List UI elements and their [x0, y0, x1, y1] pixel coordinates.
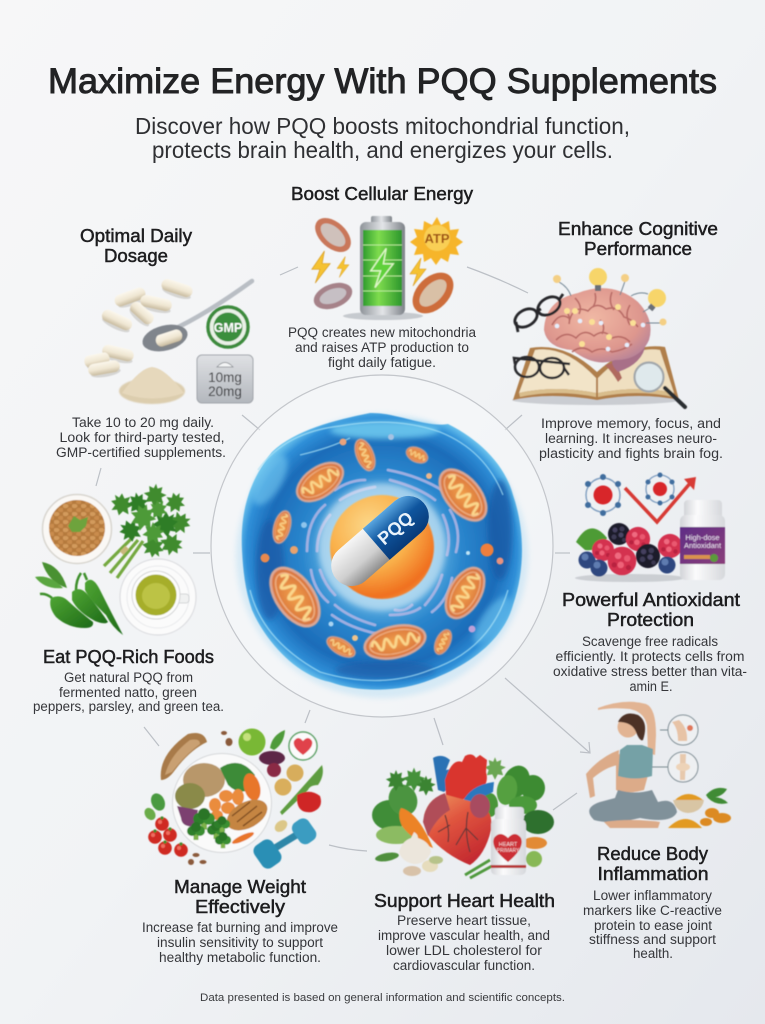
body text: Take 10 to 20 mg daily.: [72, 415, 214, 430]
body text: [56, 415, 226, 460]
body text: PQQ creates new mitochondria: [288, 325, 476, 340]
central illustration: cell with PQQ capsule: [236, 413, 528, 698]
heading: Enhance Cognitive: [558, 218, 718, 239]
body text: GMP-certified supplements.: [56, 445, 226, 460]
body text: stiffness and support: [589, 932, 716, 947]
body text: plasticity and fights brain fog.: [539, 446, 723, 461]
panel: antioxidant protection: [553, 472, 747, 694]
central ring: [211, 375, 553, 717]
icon: capsules, spoon, GMP seal, scale: 20mg: [208, 384, 242, 399]
subtitle: [135, 113, 630, 163]
heading: Optimal Daily: [80, 225, 193, 246]
body text: cardiovascular function.: [393, 958, 535, 973]
heading: Protection: [607, 609, 694, 630]
body text: improve vascular health, and: [378, 928, 550, 943]
panel: manage weight: [142, 728, 338, 965]
panel: enhance cognitive performance: [512, 218, 723, 461]
heading: Eat PQQ-Rich Foods: [43, 646, 214, 667]
body text: fight daily fatigue.: [328, 355, 436, 370]
icon: atoms, berries, bottle, arrow: High-dose: [685, 533, 720, 542]
icon: capsules, spoon, GMP seal, scale: 10mg: [208, 370, 242, 385]
panel: PQQ-rich foods: [33, 483, 224, 714]
body text: oxidative stress better than vita-: [553, 664, 747, 679]
icon: heart, vegetables, supplement bottle: PRIMARY: [497, 848, 520, 854]
heading: Performance: [584, 238, 692, 259]
panel: reduce inflammation: [583, 702, 731, 961]
body text: Scavenge free radicals: [582, 634, 718, 649]
body text: Increase fat burning and improve: [142, 920, 338, 935]
membrane highlights: [250, 422, 508, 681]
body text: Lower inflammatory: [593, 888, 712, 903]
subtitle: protects brain health, and energizes your cells.: [152, 137, 613, 163]
mitochondria: [261, 437, 495, 664]
icon: battery and mitochondria: ATP: [424, 231, 450, 246]
icon: brain, book, glasses: [512, 268, 685, 407]
heading: Inflammation: [598, 863, 708, 884]
heading: [597, 843, 709, 884]
icon: atoms, berries, bottle, arrow: [575, 472, 725, 582]
cell membrane: [242, 413, 522, 690]
body text: [553, 634, 747, 694]
body text: lower LDL cholesterol for: [386, 943, 543, 958]
heading: Effectively: [195, 896, 286, 917]
title: Maximize Energy With PQQ Supplements: [48, 62, 717, 101]
icon: heart, vegetables, supplement bottle: [372, 754, 554, 878]
body text: learning. It increases neuro-: [545, 431, 717, 446]
body text: peppers, parsley, and green tea.: [33, 699, 224, 714]
heading: [558, 218, 718, 259]
panel: support heart health: [372, 754, 555, 973]
body text: healthy metabolic function.: [159, 950, 321, 965]
body text: Get natural PQQ from: [64, 670, 193, 685]
nucleus: [318, 483, 446, 611]
footer note: Data presented is based on general information and scientific concepts.: [200, 992, 565, 1004]
body text: [142, 920, 338, 965]
body text: protein to ease joint: [594, 918, 712, 933]
body text: [539, 416, 723, 461]
cytoplasm shading: [246, 421, 516, 679]
heading: Dosage: [104, 245, 168, 266]
organelle dots: [260, 434, 504, 641]
body text: fermented natto, green: [59, 685, 197, 700]
body text: amin E.: [630, 679, 672, 694]
body text: and raises ATP production to: [295, 340, 469, 355]
heading: [174, 876, 306, 917]
icon: woman stretching, joints, turmeric: [586, 702, 731, 828]
icon: capsules, spoon, GMP seal, scale: [83, 277, 253, 404]
icon: plate of food, dumbbell, vegetables: [142, 728, 323, 871]
icon: battery and mitochondria: [309, 211, 463, 321]
body text: efficiently. It protects cells from: [556, 649, 744, 664]
body text: [378, 913, 550, 973]
panel: optimal daily dosage: [56, 225, 253, 460]
body text: health.: [633, 946, 673, 961]
connector lines: [96, 267, 590, 851]
heading: Powerful Antioxidant: [562, 589, 740, 610]
heading: [562, 589, 740, 630]
icon: natto, parsley, green tea, peppers: [35, 483, 196, 635]
body text: Preserve heart tissue,: [397, 913, 531, 928]
heading: [80, 225, 193, 266]
icon: heart, vegetables, supplement bottle: HEART: [499, 842, 518, 848]
body text: Improve memory, focus, and: [541, 416, 721, 431]
body text: Look for third-party tested,: [60, 430, 225, 445]
heading: Boost Cellular Energy: [291, 183, 474, 204]
PQQ capsule: PQQ: [374, 508, 417, 549]
body text: [583, 888, 722, 961]
PQQ capsule: [323, 487, 437, 595]
body text: [288, 325, 476, 370]
heading: Support Heart Health: [374, 890, 555, 911]
endoplasmic reticulum arcs: [307, 470, 458, 634]
heading: Reduce Body: [597, 843, 709, 864]
body text: [33, 670, 224, 714]
heading: Manage Weight: [174, 876, 306, 897]
subtitle: Discover how PQQ boosts mitochondrial function,: [135, 113, 630, 139]
panel: boost cellular energy: [288, 183, 476, 370]
body text: markers like C-reactive: [583, 903, 722, 918]
body text: insulin sensitivity to support: [157, 935, 323, 950]
icon: capsules, spoon, GMP seal, scale: GMP: [214, 321, 242, 335]
icon: atoms, berries, bottle, arrow: Antioxidant: [684, 541, 722, 550]
